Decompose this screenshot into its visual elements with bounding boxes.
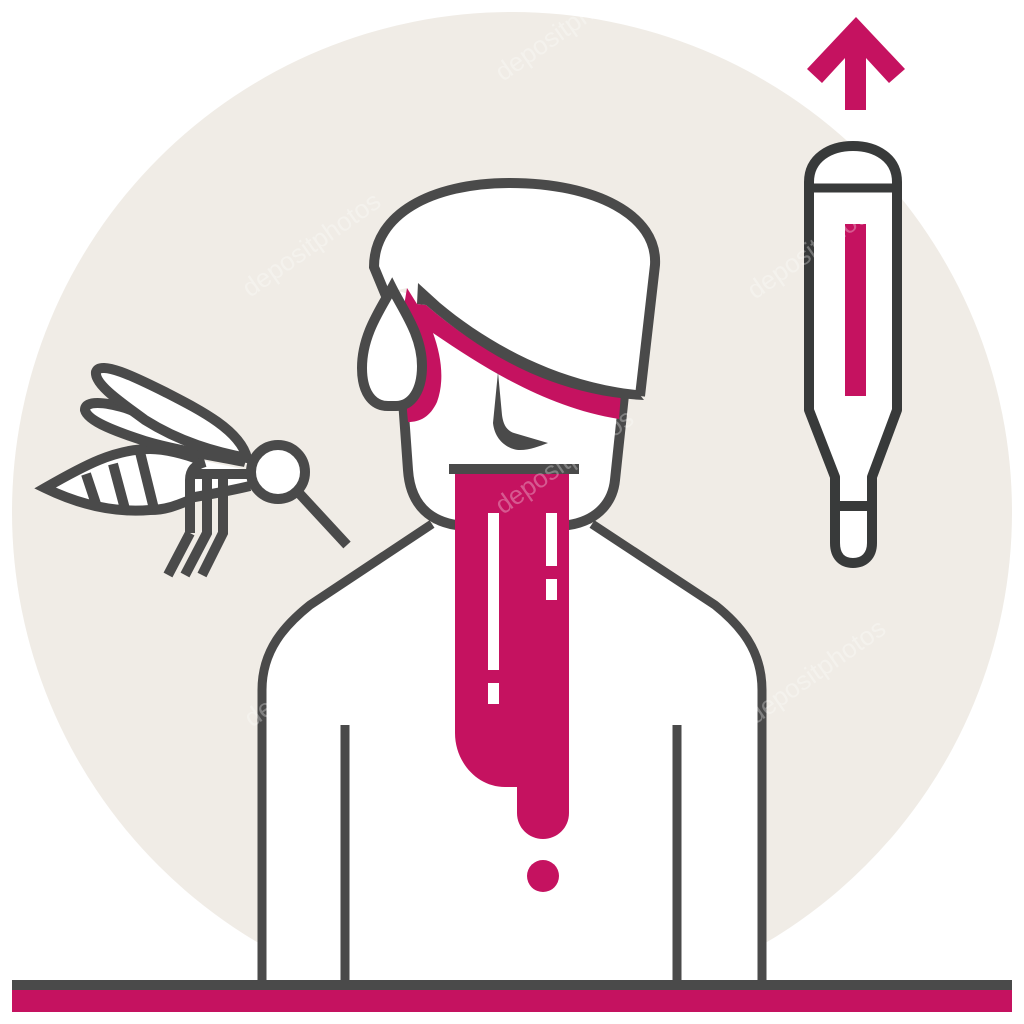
body outline	[262, 524, 762, 985]
hair outline	[374, 183, 655, 396]
watermark: depositphotos	[238, 615, 388, 733]
up arrow	[807, 17, 905, 110]
mouth	[449, 464, 579, 474]
blood drop	[527, 860, 559, 892]
abdomen outline	[45, 449, 200, 511]
person figure	[262, 183, 762, 985]
watermark: depositphotos	[741, 612, 891, 730]
thermometer icon	[809, 146, 897, 563]
nose	[493, 372, 548, 450]
abdomen fill	[45, 449, 247, 511]
thorax lower contour	[190, 486, 250, 498]
hair fringe	[417, 283, 644, 400]
legs	[168, 462, 250, 575]
sweat drop	[362, 288, 422, 406]
front wing	[96, 368, 247, 458]
watermark: depositphotos	[236, 185, 386, 303]
left arm line	[340, 725, 350, 985]
mosquito icon	[45, 368, 347, 575]
face fill	[395, 290, 630, 525]
right arm line	[672, 725, 682, 985]
fever flush band	[400, 288, 622, 422]
ground line	[12, 980, 1012, 1012]
tip line	[835, 501, 872, 511]
body fill	[262, 524, 762, 985]
hair fill	[374, 183, 655, 396]
head	[251, 445, 305, 499]
stripes	[86, 452, 154, 509]
watermark: depositphotos	[741, 187, 891, 305]
vomit blood stream	[455, 470, 569, 839]
face outline	[403, 395, 624, 525]
watermark	[236, 0, 891, 733]
rear wing	[85, 403, 245, 462]
mercury	[845, 224, 866, 396]
thermometer cap line	[809, 184, 897, 192]
highlights	[488, 513, 557, 704]
thermometer body	[809, 146, 897, 563]
proboscis	[298, 492, 347, 545]
watermark: depositphotos	[489, 402, 639, 520]
